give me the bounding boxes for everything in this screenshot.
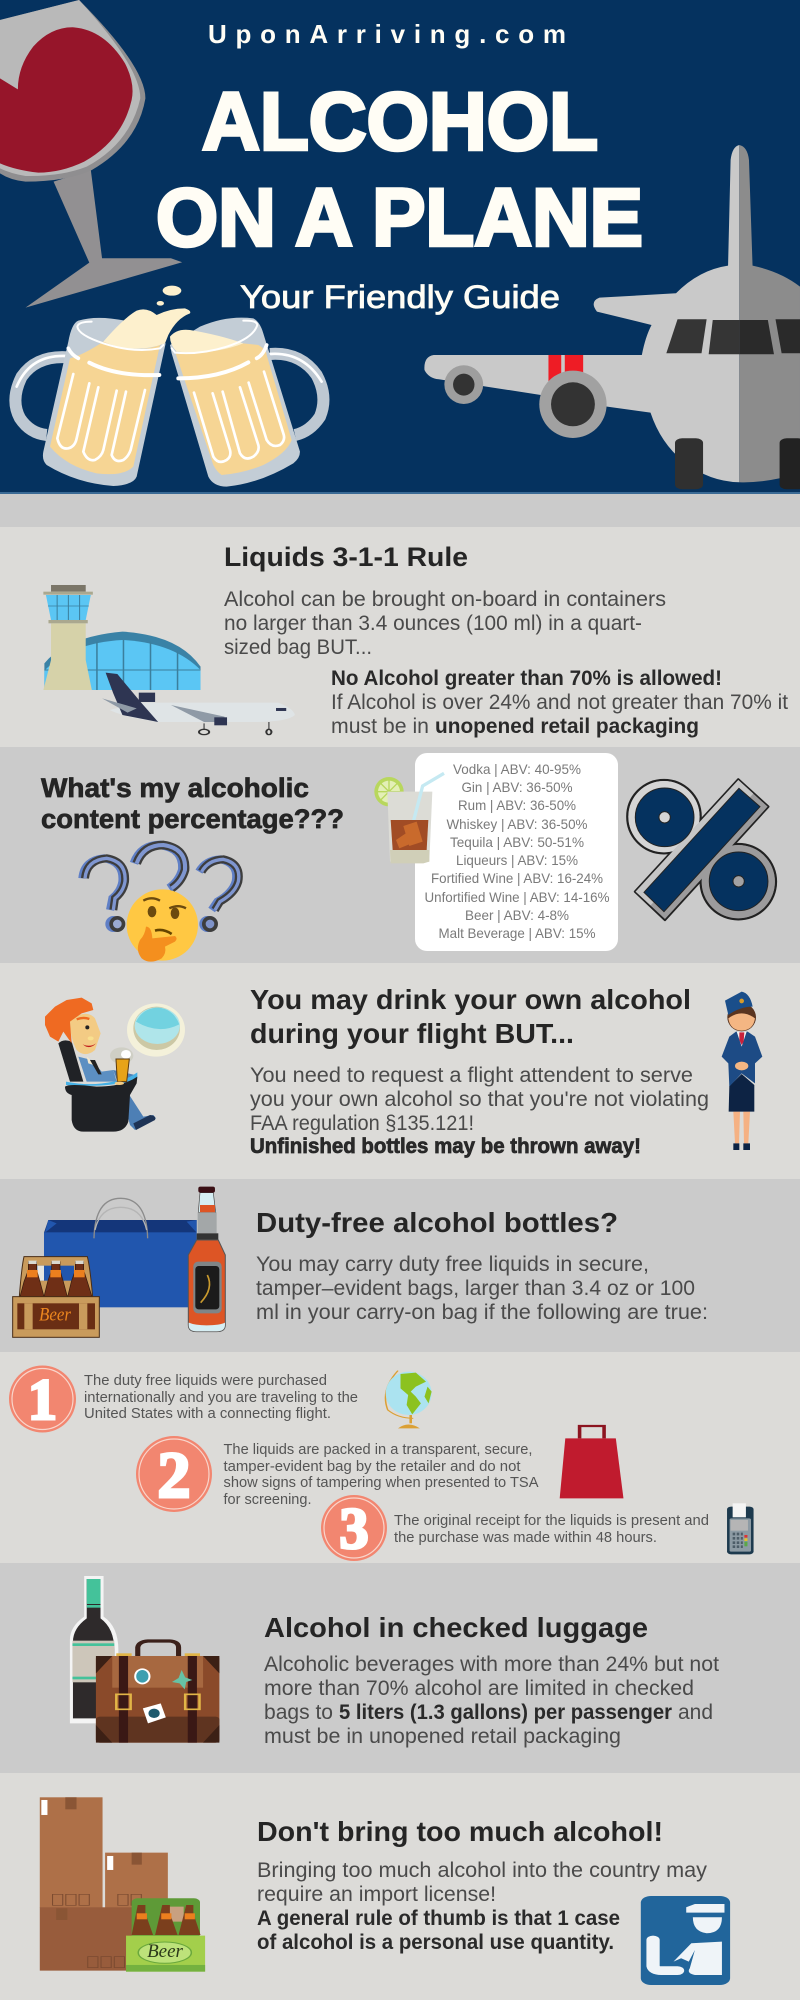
subtitle: Your Friendly Guide: [240, 279, 560, 315]
icon: wine bottle: [70, 1576, 118, 1723]
warning text: unopened retail packaging: [435, 715, 699, 738]
heading: Don't bring too much alcohol!: [257, 1816, 663, 1847]
step 1: [9, 1366, 432, 1432]
warning text: Unfinished bottles may be thrown away!: [250, 1135, 641, 1158]
step 2 text: show signs of tampering when presented to TSA: [224, 1475, 539, 1491]
heading: You may drink your own alcohol: [250, 984, 691, 1015]
heading: during your flight BUT...: [250, 1018, 574, 1049]
panel: ABV list: Tequila | ABV: 50-51%: [450, 834, 584, 850]
number badge 3: 3: [340, 1496, 368, 1561]
icon: wine glass: [0, 0, 182, 308]
body text: [257, 1859, 708, 1954]
step 2 text: tamper-evident bag by the retailer and do not: [224, 1459, 520, 1475]
warning text: [331, 667, 788, 738]
title: ON A PLANE: [156, 172, 643, 264]
body text: [256, 1253, 708, 1324]
body text: [264, 1653, 719, 1748]
icon: percent sign: [627, 779, 776, 920]
number badge 2: 2: [158, 1439, 190, 1512]
body text: You may carry duty free liquids in secure,: [256, 1253, 649, 1276]
warning text: must be in: [331, 715, 429, 738]
panel: liquids 3-1-1 rule: [0, 527, 800, 747]
heading: Alcohol in checked luggage: [264, 1612, 648, 1643]
icon: beer bottle: [188, 1187, 225, 1332]
step 3: [321, 1495, 754, 1561]
icon: red bag: [560, 1426, 623, 1498]
panel: alcohol content percentage: [0, 747, 800, 963]
panel: ABV list: Rum | ABV: 36-50%: [458, 797, 576, 813]
body text: of alcohol is a personal use quantity.: [257, 1931, 614, 1954]
panel: too much alcohol: [0, 1773, 800, 2000]
body text: You need to request a flight attendent to serve: [250, 1064, 693, 1087]
warning text: No Alcohol greater than 70% is allowed!: [331, 667, 722, 690]
panel: ABV list: Fortified Wine | ABV: 16-24%: [431, 870, 603, 886]
body text: must be in unopened retail packaging: [264, 1725, 621, 1748]
icon: airliner: [102, 673, 295, 735]
body text: you your own alcohol so that you're not violating: [250, 1088, 709, 1111]
icon: flight attendant: [722, 992, 762, 1150]
heading: [250, 984, 691, 1049]
icon: six-pack: [13, 1257, 99, 1337]
step 2 text: for screening.: [224, 1492, 312, 1508]
icon: airport terminal: [43, 585, 201, 690]
icon: airplane: [424, 145, 800, 489]
panel: ABV list: Unfortified Wine | ABV: 14-16%: [424, 889, 610, 905]
icon: passenger with beer: [45, 998, 185, 1132]
body text: Alcoholic beverages with more than 24% but not: [264, 1653, 719, 1676]
icon: card reader: [727, 1503, 754, 1554]
step 2 text: [224, 1442, 539, 1508]
panel: checked luggage: [0, 1563, 800, 1773]
heading: [41, 773, 344, 834]
icon: thinking face with question marks: [82, 845, 239, 962]
body text: require an import license!: [257, 1883, 496, 1906]
heading: Duty-free alcohol bottles?: [256, 1207, 618, 1238]
panel: ABV list: Liqueurs | ABV: 15%: [456, 852, 578, 868]
heading: Liquids 3-1-1 Rule: [224, 542, 468, 572]
body text: [224, 588, 666, 659]
body text: Bringing too much alcohol into the country may: [257, 1859, 708, 1882]
icon: suitcase: [96, 1641, 219, 1743]
step 1 text: [84, 1373, 358, 1422]
step 1 text: The duty free liquids were purchased: [84, 1373, 327, 1389]
step 2: [136, 1426, 623, 1512]
number badge 3: [321, 1495, 387, 1561]
label: beer: Beer: [147, 1941, 184, 1962]
body text: sized bag BUT...: [224, 636, 372, 659]
panel: ABV list: Beer | ABV: 4-8%: [465, 907, 569, 923]
body text: Alcohol can be brought on-board in containers: [224, 588, 666, 611]
body text: FAA regulation §135.121!: [250, 1112, 474, 1135]
panel: duty-free bottles: [0, 1179, 800, 1352]
step 3 text: the purchase was made within 48 hours.: [394, 1530, 657, 1546]
icon: right beer mug: [170, 318, 323, 487]
number badge 1: 1: [28, 1367, 57, 1432]
panel: ABV list: Whiskey | ABV: 36-50%: [446, 816, 588, 832]
number badge 2: [136, 1436, 212, 1512]
panel: ABV list: Malt Beverage | ABV: 15%: [438, 925, 596, 941]
step 1 text: United States with a connecting flight.: [84, 1406, 331, 1422]
step 3 text: [394, 1513, 709, 1546]
title: [156, 76, 643, 264]
body text: and: [678, 1701, 713, 1724]
panel: drink your own alcohol: [0, 963, 800, 1179]
icon: left beer mug: [15, 286, 190, 486]
panel: ABV list: Gin | ABV: 36-50%: [462, 779, 572, 795]
heading: content percentage???: [41, 804, 344, 834]
icon: customs officer: [641, 1896, 730, 1985]
title: ALCOHOL: [202, 76, 598, 168]
body text: bags to: [264, 1701, 333, 1724]
panel: ABV list: Vodka | ABV: 40-95%: [453, 761, 581, 777]
step 1 text: internationally and you are traveling to the: [84, 1390, 358, 1406]
warning text: If Alcohol is over 24% and not greater than 70% it: [331, 691, 788, 714]
body text: tamper–evident bags, larger than 3.4 oz or 100: [256, 1277, 695, 1300]
step 3 text: The original receipt for the liquids is present and: [394, 1513, 709, 1529]
website name: UponArriving.com: [208, 19, 566, 49]
spacer band: [0, 494, 800, 527]
body text: 5 liters (1.3 gallons) per passenger: [339, 1701, 672, 1724]
heading: What's my alcoholic: [41, 773, 309, 803]
label: beer: Beer: [39, 1304, 72, 1326]
step 2 text: The liquids are packed in a transparent, secure,: [224, 1442, 532, 1458]
number badge 1: [9, 1366, 76, 1432]
body text: A general rule of thumb is that 1 case: [257, 1907, 620, 1930]
header panel: [0, 0, 800, 494]
body text: more than 70% alcohol are limited in checked: [264, 1677, 694, 1700]
icon: stacked boxes and beer: [40, 1797, 205, 1972]
body text: [250, 1064, 709, 1135]
icon: globe: [385, 1371, 432, 1428]
panel: ABV list: [415, 753, 618, 951]
icon: shopping bag: [44, 1198, 197, 1307]
icon: cocktail glass: [374, 773, 444, 863]
body text: ml in your carry-on bag if the following are true:: [256, 1301, 708, 1324]
body text: no larger than 3.4 ounces (100 ml) in a quart-: [224, 612, 642, 635]
panel: three conditions: [0, 1352, 800, 1563]
